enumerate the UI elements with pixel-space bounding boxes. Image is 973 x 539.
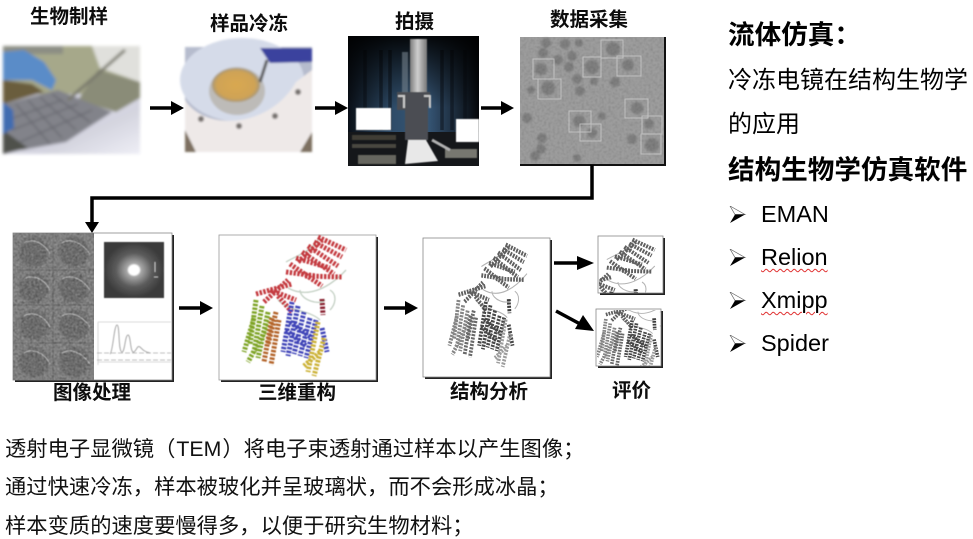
panel: data collection micrograph bbox=[520, 37, 666, 166]
list item: EMAN: EMAN bbox=[761, 201, 829, 227]
panel: evaluation top bbox=[598, 236, 665, 295]
label: 生物制样: 生物制样 bbox=[30, 6, 108, 28]
heading: 流体仿真: 流体仿真： bbox=[728, 20, 861, 50]
label: 结构分析: 结构分析 bbox=[450, 381, 528, 403]
text: subtitle line 2: 的应用 bbox=[728, 111, 800, 138]
text: subtitle line 1: 冷冻电镜在结构生物学 bbox=[728, 67, 968, 94]
text: description line 1: 透射电子显微镜（TEM）将电子束透射通过样本以产生图像； bbox=[5, 437, 584, 461]
panel: electron microscope photo bbox=[348, 36, 479, 166]
label: 三维重构: 三维重构 bbox=[258, 382, 336, 404]
panel: structure analysis bbox=[423, 238, 552, 379]
label: 评价: 评价 bbox=[612, 380, 652, 402]
label: 拍摄: 拍摄 bbox=[395, 11, 434, 33]
list item: Xmipp bbox=[730, 287, 828, 316]
arrow: step 3 to 4 bbox=[481, 101, 514, 115]
particle image tiles bbox=[13, 233, 94, 380]
arrow: step 5 to 6 bbox=[179, 301, 213, 315]
arrow: step 1 to 2 bbox=[150, 101, 184, 115]
process diagram bbox=[0, 6, 666, 402]
protein ribbon model bbox=[244, 237, 346, 376]
label: 图像处理: 图像处理 bbox=[53, 382, 131, 404]
arrow: connector from data collection to image processing bbox=[85, 165, 592, 233]
grayscale protein model bbox=[449, 245, 527, 367]
list item: EMAN bbox=[730, 201, 829, 227]
arrow: step 2 to 3 bbox=[315, 101, 348, 115]
list item: Spider bbox=[730, 330, 829, 356]
list item: Relion bbox=[730, 244, 828, 272]
text: description line 3: 样本变质的速度要慢得多，以便于研究生物材料； bbox=[5, 514, 474, 538]
arrow: to evaluation bottom bbox=[556, 311, 594, 331]
arrow: to evaluation top bbox=[554, 256, 594, 270]
label: 样品冷冻: 样品冷冻 bbox=[210, 13, 288, 35]
list item: Relion: Relion bbox=[761, 244, 828, 270]
heading: software: 结构生物学仿真软件 bbox=[728, 155, 967, 185]
label: 数据采集: 数据采集 bbox=[550, 9, 629, 31]
panel: evaluation bottom bbox=[596, 308, 663, 368]
panel: image processing bbox=[13, 233, 174, 382]
panel: 3D reconstruction bbox=[219, 235, 378, 382]
panel: sample freezing photo bbox=[180, 38, 312, 152]
list item: Spider: Spider bbox=[761, 330, 829, 356]
list item: Xmipp: Xmipp bbox=[761, 287, 828, 313]
text: description line 2: 通过快速冷冻，样本被玻化并呈玻璃状，而不会形成冰晶； bbox=[5, 475, 559, 499]
arrow: step 6 to 7 bbox=[384, 301, 418, 315]
panel: biological sample preparation photo bbox=[3, 46, 140, 154]
